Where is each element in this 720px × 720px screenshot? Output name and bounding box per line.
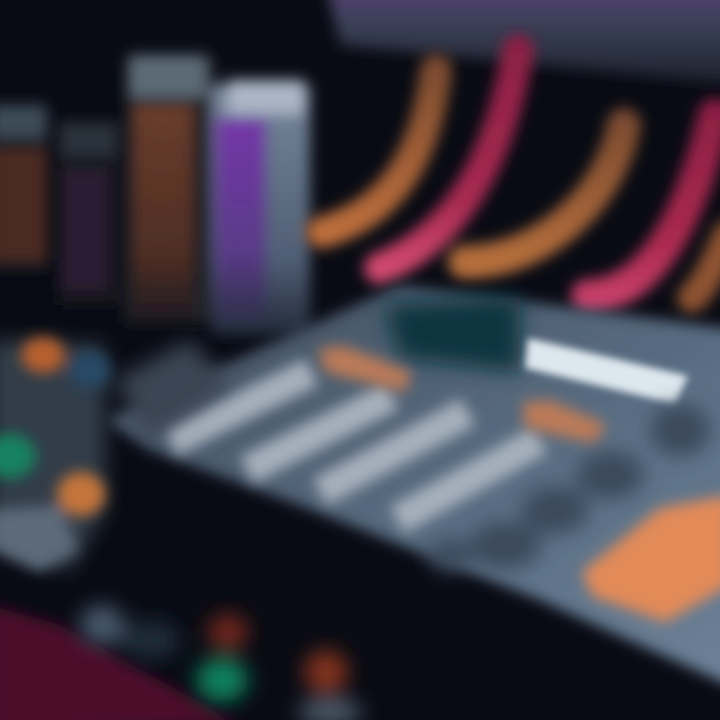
calculator display: white panel [525,338,688,404]
calculator keys: large orange key [582,495,720,622]
background band: top right [325,0,720,85]
left device panel [0,340,230,570]
calculator keys: light rows [170,372,540,520]
bottom dark red band [0,605,240,720]
calculator keys: orange top keys [318,346,606,444]
calculator keys: dark blue round keys [428,404,710,571]
calculator dark screen [385,296,520,372]
line chart: orange and pink curves [322,50,720,298]
bottom buttons [80,605,362,720]
calculator body [105,285,720,690]
bar chart: cylinders [0,55,310,335]
left device buttons [0,337,110,572]
